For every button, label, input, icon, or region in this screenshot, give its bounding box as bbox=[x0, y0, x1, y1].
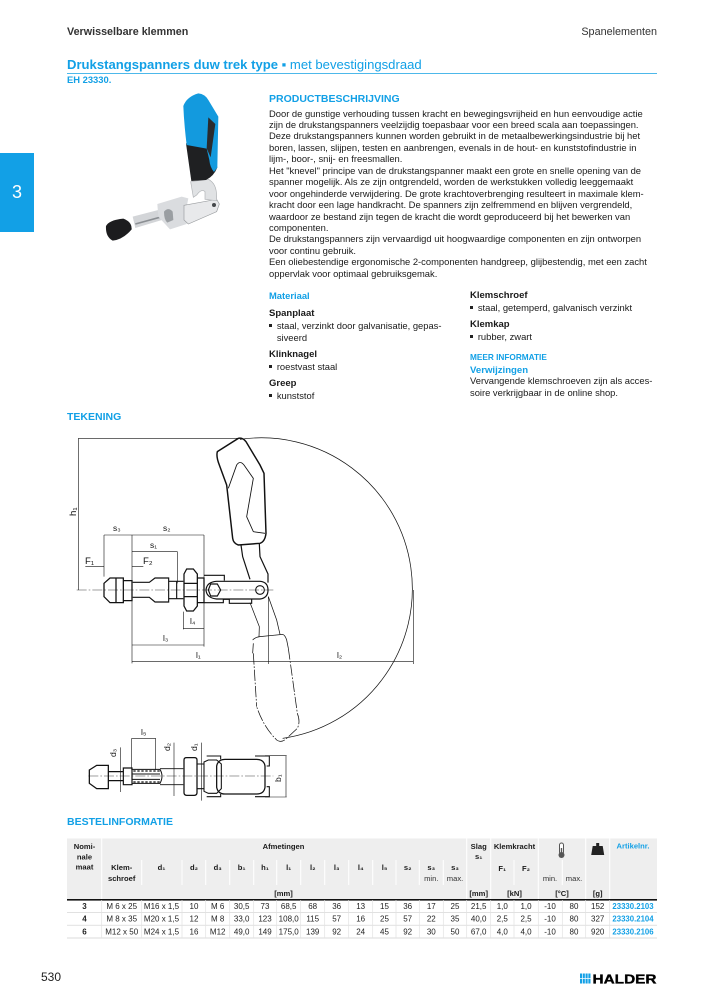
materials: left column: Spanplaat bbox=[269, 308, 314, 319]
technical drawing: side view: h₁ bbox=[68, 507, 79, 516]
order table: l₄ bbox=[358, 863, 364, 872]
order table: l₃ bbox=[334, 863, 340, 872]
technical drawing: side view: F₂ bbox=[143, 556, 153, 567]
order table: 115 bbox=[306, 914, 320, 924]
order table: 36 bbox=[403, 902, 413, 911]
order table: 25 bbox=[380, 914, 389, 924]
technical drawing: side view: s₂ bbox=[163, 523, 170, 533]
technical drawing: side view: l₃ bbox=[163, 633, 168, 643]
technical drawing: top view: l₅ bbox=[141, 727, 147, 737]
order table: 23330.2104 bbox=[612, 914, 654, 924]
order table: 23330.2106 bbox=[612, 928, 654, 936]
technical drawing: side view: s₃ bbox=[113, 523, 121, 533]
order table: 45 bbox=[380, 928, 389, 936]
technical drawing: side view: l₁ bbox=[196, 650, 201, 660]
order table: Afmetingen bbox=[263, 842, 305, 851]
logo: HALDER: HALDER bbox=[592, 971, 657, 986]
materials: right column: Klemschroef bbox=[470, 290, 528, 301]
more information: Vervangende klemschroeven zijn als acces- soire verkrijgbaar in de online shop. bbox=[470, 375, 652, 398]
order table: d₁ bbox=[158, 863, 165, 872]
running header: category: Spanelementen bbox=[581, 26, 657, 38]
order table: 12 bbox=[190, 914, 199, 924]
order table: 80 bbox=[570, 902, 579, 911]
product code: EH 23330. bbox=[67, 74, 111, 85]
order table: 1,0 bbox=[520, 902, 532, 911]
order table: M24 x 1,5 bbox=[144, 928, 180, 936]
materials: right column bbox=[470, 290, 632, 342]
order table: 108,0 bbox=[279, 914, 299, 924]
order table: 23330.2103 bbox=[612, 902, 654, 911]
order table: 327 bbox=[591, 914, 605, 924]
page number: 530 bbox=[41, 970, 61, 984]
materials: right column: Klemkap bbox=[470, 319, 510, 330]
materials: left column: Greep bbox=[269, 378, 296, 389]
materials: left column: Klinknagel bbox=[269, 349, 317, 360]
technical drawing: top view: d₂ bbox=[162, 743, 172, 751]
materials: left column: Materiaal bbox=[269, 290, 310, 301]
order table: M 8 bbox=[211, 914, 225, 924]
order table: 35 bbox=[451, 914, 460, 924]
order table: Klem- bbox=[111, 863, 133, 872]
materials: right column: rubber, zwart bbox=[478, 331, 532, 342]
order table: 30 bbox=[427, 928, 436, 936]
order table: 57 bbox=[403, 914, 413, 924]
order table: -10 bbox=[544, 914, 556, 924]
technical drawing: top view: d₃ bbox=[108, 748, 118, 757]
order table: Nomi- bbox=[74, 842, 96, 851]
order table: 67,0 bbox=[471, 928, 487, 936]
order table: F₁ bbox=[498, 864, 506, 873]
order table: Artikelnr. bbox=[617, 842, 649, 850]
heading: order information: BESTELINFORMATIE bbox=[67, 816, 173, 828]
order table: l₁ bbox=[286, 863, 291, 872]
order table: 92 bbox=[332, 928, 342, 936]
order table: 80 bbox=[570, 928, 579, 936]
technical drawing: side view: l₄ bbox=[190, 616, 196, 626]
order table: 920 bbox=[591, 928, 605, 936]
order table: 2,5 bbox=[520, 914, 532, 924]
icon: weight bbox=[591, 843, 604, 855]
order table: 22 bbox=[427, 914, 436, 924]
order table: l₅ bbox=[382, 863, 388, 872]
heading: drawing: TEKENING bbox=[67, 410, 121, 422]
order table: -10 bbox=[544, 928, 556, 936]
order table: min. bbox=[543, 874, 557, 883]
order table: [°C] bbox=[555, 889, 569, 898]
order table: 50 bbox=[451, 928, 460, 936]
order table: d₃ bbox=[214, 863, 222, 872]
order table: 15 bbox=[380, 902, 389, 911]
order table: M20 x 1,5 bbox=[144, 914, 180, 924]
order table: 92 bbox=[403, 928, 413, 936]
title bbox=[67, 57, 657, 74]
order table: [g] bbox=[593, 889, 603, 898]
running header: section name: Verwisselbare klemmen bbox=[67, 26, 188, 38]
product description text: Door de gunstige verhouding tussen kracht en bewegingsvrijheid en hun eenvoudige actie zijn de drukstangspanners veelzijdig toepasbaar voor een breed scala aan toepassingen. Deze drukstangspanners kunnen worden gebruikt in de metaalbewerkingsindustrie bij het boren, lassen, slijpen, testen en aanbrengen, evenals in de hout- en kunststofindustrie in lijm-, boor-, snij- en freesmallen. Het "knevel" principe van de drukstangspanner maakt een grote en snelle opening van de spanner mogelijk. Als ze zijn ontgrendeld, worden de werkstukken volledig leeggemaakt voor ongehinderde verwijdering. De grote krachtoverbrenging resulteert in maximale klem- kracht door een lage handkracht. De spanners zijn zelfremmend en blijven vergrendeld, waardoor ze bestand zijn tegen de kracht die wordt geproduceerd bij het bewerken van componenten. De drukstangspanners zijn vervaardigd uit hoogwaardige componenten en zijn ontworpen voor continu gebruik. Een oliebestendige ergonomische 2-componenten handgreep, glijbestendig, met een zacht oppervlak voor optimaal gebruiksgemak. bbox=[269, 108, 647, 279]
technical drawing: top view: b₁ bbox=[273, 774, 283, 782]
chapter tab: 3 bbox=[12, 182, 22, 202]
order table: F₂ bbox=[522, 864, 530, 873]
order table: 149 bbox=[258, 928, 272, 936]
technical drawing: side view: l₂ bbox=[337, 650, 342, 660]
order table: 2,5 bbox=[497, 914, 508, 924]
order table: 24 bbox=[356, 928, 366, 936]
order table: 40,0 bbox=[471, 914, 487, 924]
order table: 10 bbox=[190, 902, 199, 911]
order table: s₂ bbox=[404, 863, 412, 872]
order table: M 8 x 35 bbox=[106, 914, 138, 924]
order table: 30,5 bbox=[234, 902, 250, 911]
technical drawing: side view: s₁ bbox=[150, 540, 157, 550]
order table: s₃ bbox=[451, 863, 459, 872]
order table: 16 bbox=[190, 928, 199, 936]
more information bbox=[470, 352, 652, 398]
order table: 139 bbox=[306, 928, 320, 936]
order table: maat bbox=[76, 862, 94, 872]
order table: [mm] bbox=[274, 889, 293, 898]
order table: 57 bbox=[332, 914, 342, 924]
materials: right column: staal, getemperd, galvanisch verzinkt bbox=[478, 302, 632, 313]
order table: 25 bbox=[451, 902, 460, 911]
order table: M12 x 50 bbox=[105, 928, 139, 936]
order table: Slag bbox=[471, 842, 487, 851]
order table: [mm] bbox=[469, 889, 488, 898]
order table: h₁ bbox=[261, 863, 269, 872]
order table: 73 bbox=[261, 902, 270, 911]
order table: 4,0 bbox=[497, 928, 508, 936]
more information: Verwijzingen bbox=[470, 365, 528, 376]
more information: MEER INFORMATIE bbox=[470, 352, 547, 362]
order table: 1,0 bbox=[497, 902, 508, 911]
order table: schroef bbox=[108, 874, 136, 883]
order table: 13 bbox=[356, 902, 366, 911]
order table: d₂ bbox=[190, 863, 198, 872]
order table: M12 bbox=[210, 928, 226, 936]
order table: max. bbox=[566, 874, 582, 883]
order table: 68,5 bbox=[281, 902, 297, 911]
order table: nale bbox=[77, 852, 92, 862]
materials: left column: staal, verzinkt door galvanisatie, gepas- siveerd bbox=[269, 320, 442, 343]
order table: 80 bbox=[570, 914, 579, 924]
order table: 68 bbox=[308, 902, 318, 911]
icon: thermometer bbox=[558, 843, 564, 858]
order table: l₂ bbox=[310, 863, 315, 872]
order table: 6 bbox=[82, 928, 87, 936]
order table: 16 bbox=[356, 914, 366, 924]
order table: 36 bbox=[332, 902, 342, 911]
order table: b₁ bbox=[238, 863, 246, 872]
materials: left column bbox=[269, 290, 442, 401]
order table: s₃ bbox=[427, 863, 436, 872]
heading: product description: PRODUCTBESCHRIJVING bbox=[269, 93, 400, 105]
order table: 152 bbox=[591, 902, 605, 911]
order table: 33,0 bbox=[234, 914, 250, 924]
title: Drukstangspanners duw trek type ▪ met bevestigingsdraad bbox=[67, 57, 422, 72]
order table: 4 bbox=[82, 914, 87, 924]
order table: max. bbox=[447, 874, 463, 883]
order table: M 6 bbox=[211, 902, 225, 911]
order table: 3 bbox=[82, 902, 87, 911]
order table: 49,0 bbox=[234, 928, 250, 936]
order table: Klemkracht bbox=[494, 842, 536, 851]
order table: 123 bbox=[258, 914, 272, 924]
technical drawing: side view: F₁ bbox=[85, 556, 94, 567]
order table: M16 x 1,5 bbox=[144, 902, 180, 911]
order table: min. bbox=[424, 874, 438, 883]
technical drawing: top view: d₁ bbox=[189, 743, 199, 751]
chapter tab bbox=[0, 153, 34, 232]
order table: [kN] bbox=[507, 889, 522, 898]
materials: left column: roestvast staal bbox=[277, 361, 337, 372]
materials: left column: kunststof bbox=[277, 390, 314, 401]
order table: 17 bbox=[427, 902, 436, 911]
order table: -10 bbox=[544, 902, 556, 911]
order table: 175,0 bbox=[279, 928, 299, 936]
order table: s₁ bbox=[475, 852, 482, 861]
order table: 4,0 bbox=[520, 928, 532, 936]
order table: M 6 x 25 bbox=[106, 902, 138, 911]
order table: 21,5 bbox=[471, 902, 487, 911]
